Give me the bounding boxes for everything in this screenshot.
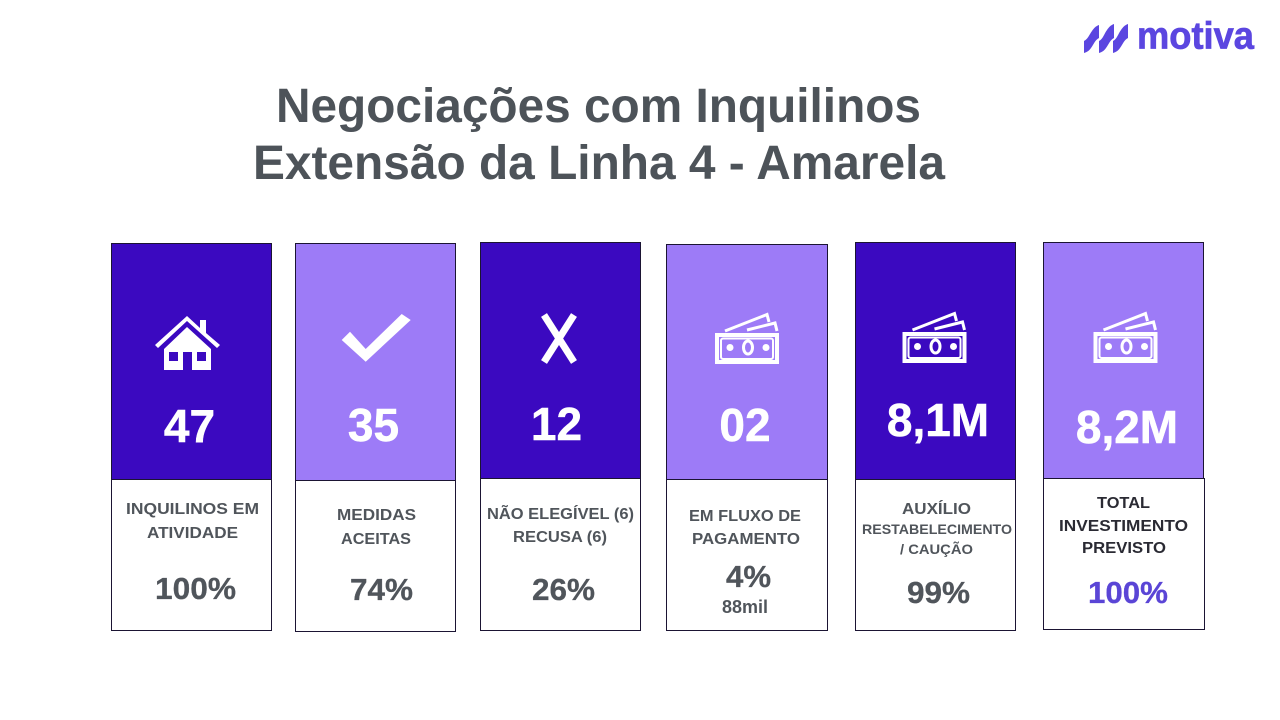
panel: em fluxo de pagamento: PAGAMENTO bbox=[692, 531, 800, 548]
panel: em fluxo de pagamento bbox=[666, 244, 828, 630]
panel: auxilio restabelecimento: AUXÍLIO bbox=[902, 499, 971, 518]
icon: house bbox=[155, 316, 220, 370]
icon: cross bbox=[544, 315, 574, 362]
panel: auxilio restabelecimento: 99% bbox=[907, 575, 970, 610]
panel: auxilio restabelecimento bbox=[856, 242, 1016, 630]
panel: nao elegivel / recusa: NÃO ELEGÍVEL (6) bbox=[487, 503, 634, 523]
panel: em fluxo de pagamento: 4% bbox=[726, 559, 771, 594]
panel: em fluxo de pagamento: 02 bbox=[719, 399, 771, 451]
panel: total investimento previsto: 8,2M bbox=[1076, 401, 1178, 453]
panel: auxilio restabelecimento: 8,1M bbox=[887, 394, 989, 446]
title bbox=[253, 80, 945, 190]
icon: banknotes bbox=[1096, 314, 1156, 361]
panel: auxilio restabelecimento: RESTABELECIMENTO bbox=[862, 521, 1012, 537]
panel: nao elegivel / recusa bbox=[480, 242, 640, 630]
panel: nao elegivel / recusa: RECUSA (6) bbox=[513, 529, 607, 546]
panel: inquilinos em atividade: 47 bbox=[164, 400, 215, 452]
logo: motiva: motiva bbox=[1137, 16, 1255, 58]
panel: total investimento previsto: 100% bbox=[1088, 575, 1168, 610]
panel: medidas aceitas: ACEITAS bbox=[341, 531, 411, 548]
panel: em fluxo de pagamento: 88mil bbox=[722, 597, 768, 617]
title: Extensão da Linha 4 - Amarela bbox=[253, 137, 945, 190]
panel: inquilinos em atividade: ATIVIDADE bbox=[147, 525, 238, 542]
panel: nao elegivel / recusa: 12 bbox=[531, 398, 582, 450]
icon: check mark bbox=[342, 314, 411, 362]
panel: inquilinos em atividade: 100% bbox=[155, 571, 236, 606]
panel: total investimento previsto: INVESTIMENTO bbox=[1059, 518, 1188, 535]
icon: banknotes bbox=[904, 314, 964, 361]
title: Negociações com Inquilinos bbox=[276, 80, 921, 133]
panel: em fluxo de pagamento: EM FLUXO DE bbox=[689, 508, 801, 525]
panel: medidas aceitas: 35 bbox=[348, 399, 399, 451]
panel: medidas aceitas bbox=[296, 244, 456, 632]
panel: medidas aceitas: 74% bbox=[350, 572, 413, 607]
panel: medidas aceitas: MEDIDAS bbox=[337, 507, 416, 524]
panel: inquilinos em atividade bbox=[112, 244, 272, 630]
logo: motiva bbox=[1084, 16, 1255, 58]
panel: nao elegivel / recusa: 26% bbox=[532, 572, 595, 607]
panel: inquilinos em atividade: INQUILINOS EM bbox=[126, 501, 259, 518]
panel: auxilio restabelecimento: / CAUÇÃO bbox=[900, 540, 973, 557]
panel: total investimento previsto: PREVISTO bbox=[1082, 540, 1166, 557]
icon: banknotes bbox=[717, 314, 777, 362]
panel: total investimento previsto bbox=[1044, 242, 1204, 630]
panel: total investimento previsto: TOTAL bbox=[1097, 495, 1150, 512]
